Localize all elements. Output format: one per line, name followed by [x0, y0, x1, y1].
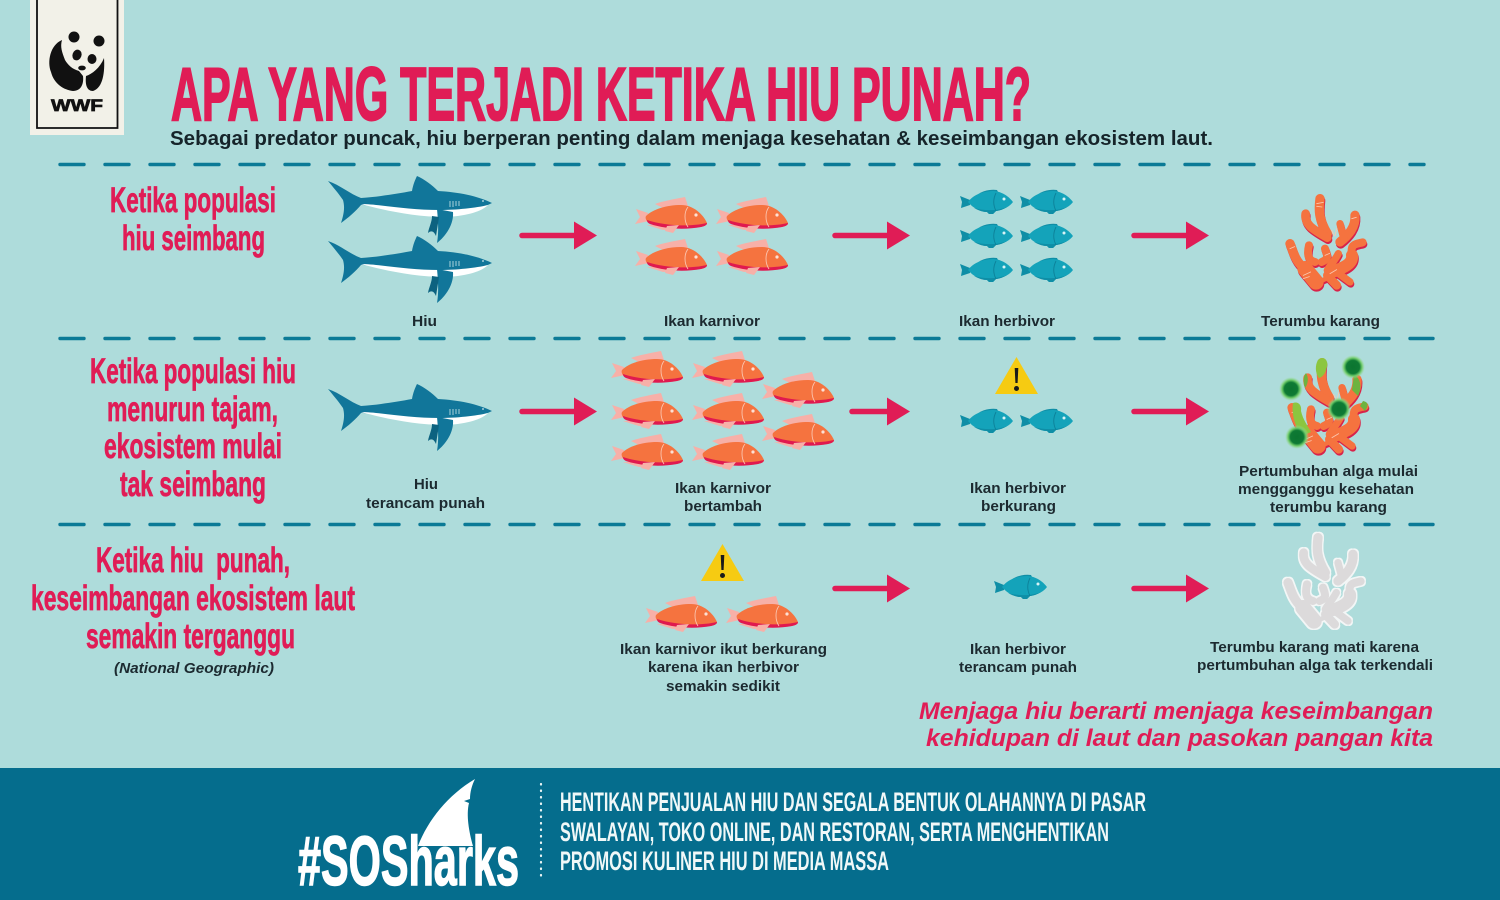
labels: row 3: Ikan herbivor: [970, 641, 1066, 658]
heading: row 2: ekosistem mulai: [104, 427, 282, 466]
heading: row 2: [90, 352, 296, 504]
labels: row 1: Hiu: [412, 313, 437, 330]
icon: coral with algae: [1279, 355, 1367, 451]
panel: footer: [0, 768, 1500, 900]
heading: row 3: [31, 541, 355, 656]
labels: row 1: [412, 313, 1380, 330]
heading: row 1: Ketika populasi: [110, 181, 276, 220]
heading: row 2: tak seimbang: [120, 465, 266, 504]
callout: tagline: [919, 698, 1433, 752]
icon: warning: [995, 357, 1038, 394]
labels: row 2: terancam punah: [366, 495, 485, 512]
heading: row 2: menurun tajam,: [107, 390, 278, 429]
icon: warning: [701, 544, 744, 581]
labels: row 3: karena ikan herbivor: [648, 659, 799, 676]
icon: reduced herbivore fish: [960, 409, 1073, 433]
arrow: [1134, 574, 1209, 602]
icon: healthy coral: [1290, 199, 1363, 287]
icon: endangered herbivore fish: [994, 575, 1047, 599]
heading: row 2: Ketika populasi hiu: [90, 352, 296, 391]
labels: row 2: berkurang: [981, 498, 1056, 515]
labels: row 3: Terumbu karang mati karena: [1210, 639, 1420, 656]
logo: WWF panda: [30, 0, 124, 135]
labels: row 2: [366, 463, 1418, 516]
icon: herbivore fish group: [960, 190, 1073, 282]
labels: row 1: Ikan herbivor: [959, 313, 1055, 330]
icon: one shark: [328, 384, 492, 451]
subtitle: Sebagai predator puncak, hiu berperan penting dalam menjaga kesehatan & keseimbangan ekosistem laut.: [170, 128, 1213, 150]
labels: row 2: terumbu karang: [1270, 499, 1387, 516]
labels: row 2: bertambah: [684, 498, 762, 515]
labels: row 3: Ikan karnivor ikut berkurang: [620, 641, 827, 658]
heading: row 3: semakin terganggu: [86, 617, 295, 656]
heading: row 1: hiu seimbang: [122, 219, 265, 258]
labels: row 3: semakin sedikit: [666, 678, 780, 695]
panel: hiu punah: [31, 536, 1433, 695]
heading: row 3: keseimbangan ekosistem laut: [31, 579, 355, 618]
arrow: [835, 574, 910, 602]
labels: row 2: Hiu: [414, 476, 438, 493]
labels: row 2: Pertumbuhan alga mulai: [1239, 463, 1418, 480]
panel: populasi hiu seimbang: [110, 176, 1380, 330]
arrow: [1134, 398, 1209, 426]
labels: row 3: terancam punah: [959, 659, 1077, 676]
panel: populasi hiu menurun: [90, 351, 1418, 516]
icon: shark fin: [418, 779, 475, 846]
arrow: [852, 398, 910, 426]
source note: (National Geographic): [114, 661, 274, 677]
labels: row 2: mengganggu kesehatan: [1238, 481, 1414, 498]
icon: two sharks: [328, 176, 492, 303]
labels: row 2: Ikan herbivor: [970, 480, 1066, 497]
arrow: [1134, 222, 1209, 250]
logo: WWF panda: WWF: [51, 96, 103, 115]
labels: row 3: [620, 639, 1433, 695]
heading: row 3: Ketika hiu punah,: [96, 541, 290, 580]
arrow: [522, 398, 597, 426]
arrow: [522, 222, 597, 250]
call to action text: [560, 787, 1146, 876]
icon: declining carnivore fish: [645, 596, 798, 632]
icon: carnivore fish group: [635, 197, 788, 275]
call to action text: SWALAYAN, TOKO ONLINE, DAN RESTORAN, SERTA MENGHENTIKAN: [560, 817, 1109, 847]
icon: increased carnivore fish: [611, 351, 834, 470]
call to action text: PROMOSI KULINER HIU DI MEDIA MASSA: [560, 846, 889, 876]
labels: row 1: Terumbu karang: [1261, 313, 1380, 330]
labels: row 1: Ikan karnivor: [664, 313, 760, 330]
heading: row 1: [110, 181, 276, 258]
callout: tagline: Menjaga hiu berarti menjaga keseimbangan: [919, 698, 1433, 725]
hashtag: #SOSharks: [298, 822, 519, 900]
labels: row 2: Ikan karnivor: [675, 480, 771, 497]
labels: row 3: pertumbuhan alga tak terkendali: [1197, 657, 1433, 674]
arrow: [835, 222, 910, 250]
callout: tagline: kehidupan di laut dan pasokan pangan kita: [926, 725, 1433, 752]
icon: dead coral: [1287, 536, 1362, 626]
